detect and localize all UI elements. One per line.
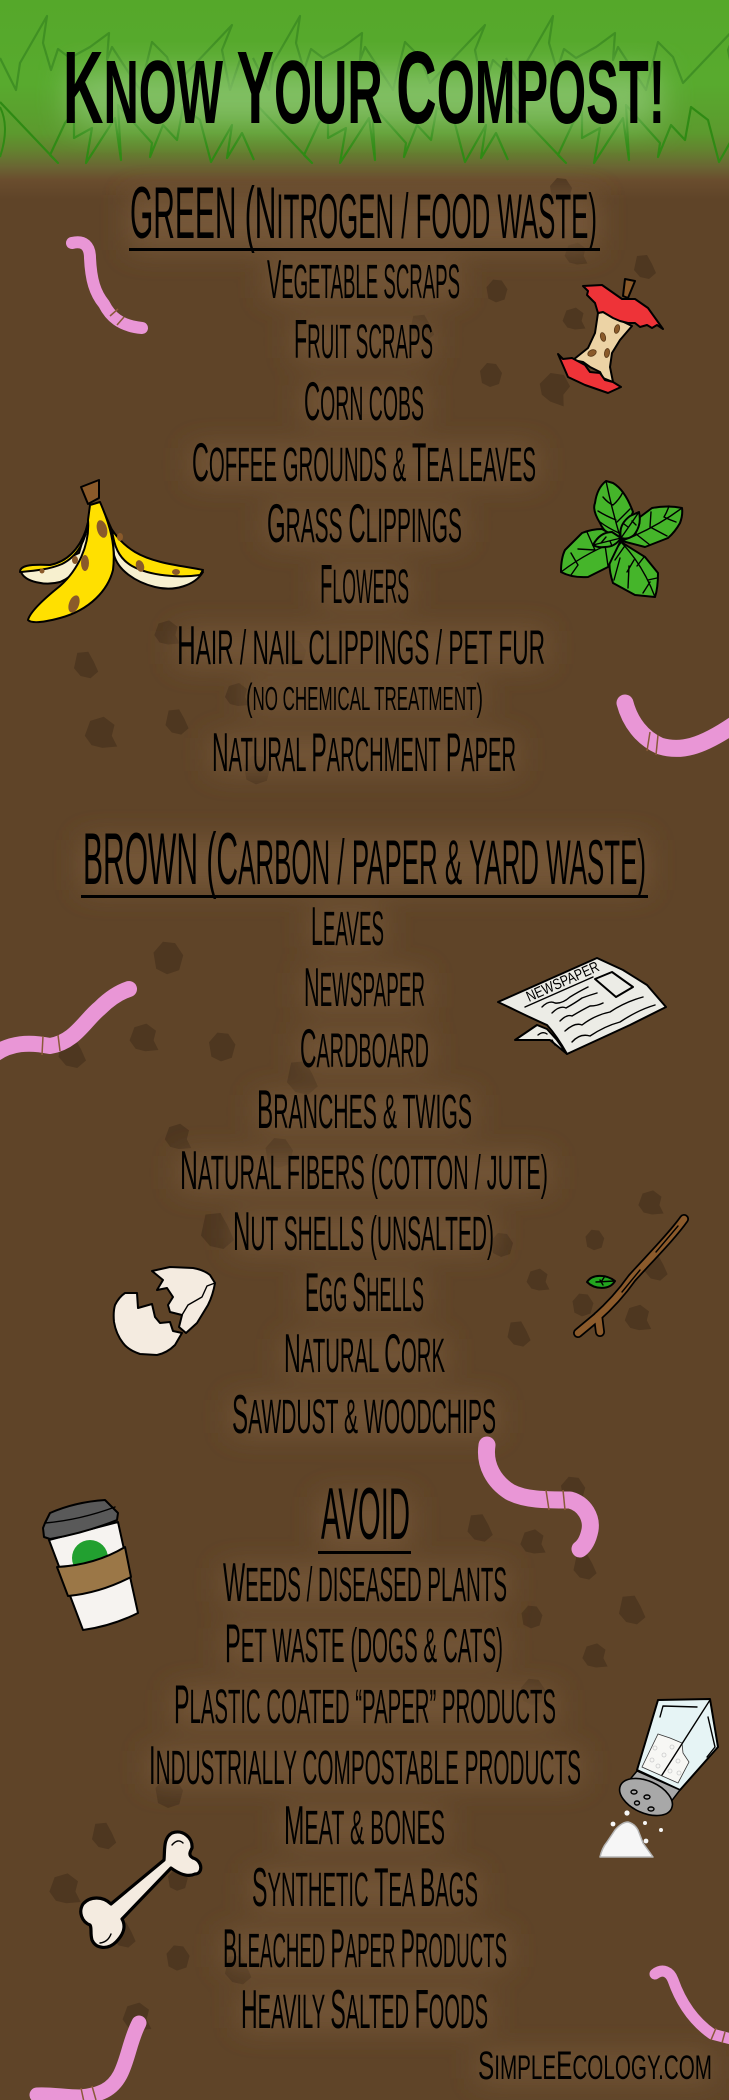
icon: bone: [81, 1832, 201, 1947]
list: green items: [177, 248, 545, 783]
list: green items: FRUIT SCRAPS: [294, 308, 433, 370]
list: brown items: [180, 895, 548, 1445]
soil clods: [49, 178, 668, 2030]
item: GRASS CLIPPINGS: [267, 492, 462, 554]
text: AVOID: [321, 1474, 410, 1555]
icon: newspaper: [498, 958, 666, 1054]
item note: (NO CHEMICAL TREATMENT): [246, 677, 483, 719]
icon: cracked egg: [114, 1267, 215, 1355]
heading: avoid section: [318, 1474, 411, 1555]
icon: banana peel: [20, 480, 203, 622]
item: BLEACHED PAPER PRODUCTS: [223, 1917, 507, 1979]
list: green items: VEGETABLE SCRAPS: [267, 248, 460, 310]
item: NATURAL CORK: [284, 1322, 445, 1384]
item: NATURAL PARCHMENT PAPER: [212, 721, 516, 783]
list: avoid items: [149, 1551, 581, 2040]
list: green items: FLOWERS: [320, 553, 409, 615]
list: brown items: LEAVES: [311, 895, 384, 957]
worm: upper left: [72, 242, 142, 328]
list: brown items: BRANCHES & TWIGS: [257, 1078, 472, 1140]
item: EGG SHELLS: [305, 1261, 424, 1323]
grass blades: [0, 16, 729, 163]
item: COFFEE GROUNDS & TEA LEAVES: [192, 431, 536, 493]
icon: twig with leaf: [578, 1219, 684, 1333]
item: HEAVILY SALTED FOODS: [241, 1978, 488, 2040]
newspaper masthead: NEWSPAPER: [524, 958, 602, 1006]
worm: lower right: [655, 1971, 729, 2043]
worm: bottom left: [37, 2023, 139, 2100]
worm: left edge: [0, 989, 129, 1056]
icon: salt shaker: [600, 1699, 718, 1857]
list: brown items: NEWSPAPER: [304, 956, 425, 1018]
worm: centre right: [486, 1445, 590, 1549]
icon: mint leaves: [561, 481, 682, 597]
icon: coffee cup: [43, 1500, 138, 1630]
worm: right edge: [625, 703, 729, 755]
list: avoid items: MEAT & BONES: [284, 1794, 445, 1856]
icon: apple core: [558, 279, 663, 393]
list: brown items: CARDBOARD: [300, 1017, 429, 1079]
list: green items: CORN COBS: [304, 370, 424, 432]
item: SYNTHETIC TEA BAGS: [252, 1856, 478, 1918]
